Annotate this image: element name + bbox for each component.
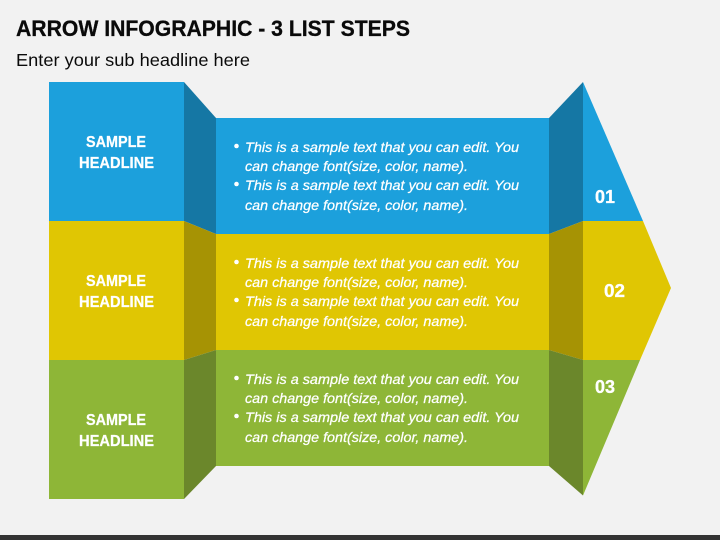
arrow segment 02: 02 — [604, 281, 625, 301]
text panel 1: This is a sample text that you can edit. You — [245, 139, 519, 155]
text panel 2: can change font(size, color, name). — [245, 274, 468, 290]
text panel 2: can change font(size, color, name). — [245, 313, 468, 329]
headline box 3: SAMPLE — [86, 412, 146, 429]
headline box 1 — [49, 82, 184, 221]
panel: step 2 yellow — [49, 221, 671, 360]
text panel 3: can change font(size, color, name). — [245, 390, 468, 406]
left fold 1 — [184, 82, 216, 234]
text panel 3: This is a sample text that you can edit. You — [245, 371, 519, 387]
title: ARROW INFOGRAPHIC - 3 LIST STEPS — [16, 16, 410, 41]
right fold 1 — [549, 82, 583, 234]
panel: step 1 blue — [49, 82, 643, 234]
text panel 1: This is a sample text that you can edit. You — [245, 177, 519, 193]
headline box 2: SAMPLE — [86, 273, 146, 290]
footer bar — [0, 535, 720, 540]
text panel 1: can change font(size, color, name). — [245, 197, 468, 213]
arrow segment 03 — [583, 360, 640, 496]
text panel 3: This is a sample text that you can edit. You — [245, 409, 519, 425]
arrow segment 03: 03 — [595, 377, 615, 397]
subtitle: Enter your sub headline here — [16, 50, 250, 70]
right fold 2 — [549, 221, 583, 360]
text panel 3: can change font(size, color, name). — [245, 429, 468, 445]
headline box 2 — [49, 221, 184, 360]
arrow segment 01: 01 — [595, 187, 615, 207]
headline box 3 — [49, 360, 184, 499]
text panel 2 — [216, 234, 549, 350]
text panel 1: can change font(size, color, name). — [245, 158, 468, 174]
headline box 3: HEADLINE — [79, 433, 154, 450]
text panel 3 — [216, 350, 549, 466]
arrow segment 01 — [583, 82, 643, 221]
headline box 2: HEADLINE — [79, 294, 154, 311]
panel: step 3 green — [49, 350, 640, 499]
text panel 2: This is a sample text that you can edit. You — [245, 293, 519, 309]
right fold 3 — [549, 350, 583, 496]
headline box 1: HEADLINE — [79, 155, 154, 172]
left fold 2 — [184, 221, 216, 360]
text panel 2: This is a sample text that you can edit. You — [245, 255, 519, 271]
headline box 1: SAMPLE — [86, 134, 146, 151]
text panel 1 — [216, 118, 549, 234]
left fold 3 — [184, 350, 216, 499]
arrow segment 02 — [583, 221, 671, 360]
